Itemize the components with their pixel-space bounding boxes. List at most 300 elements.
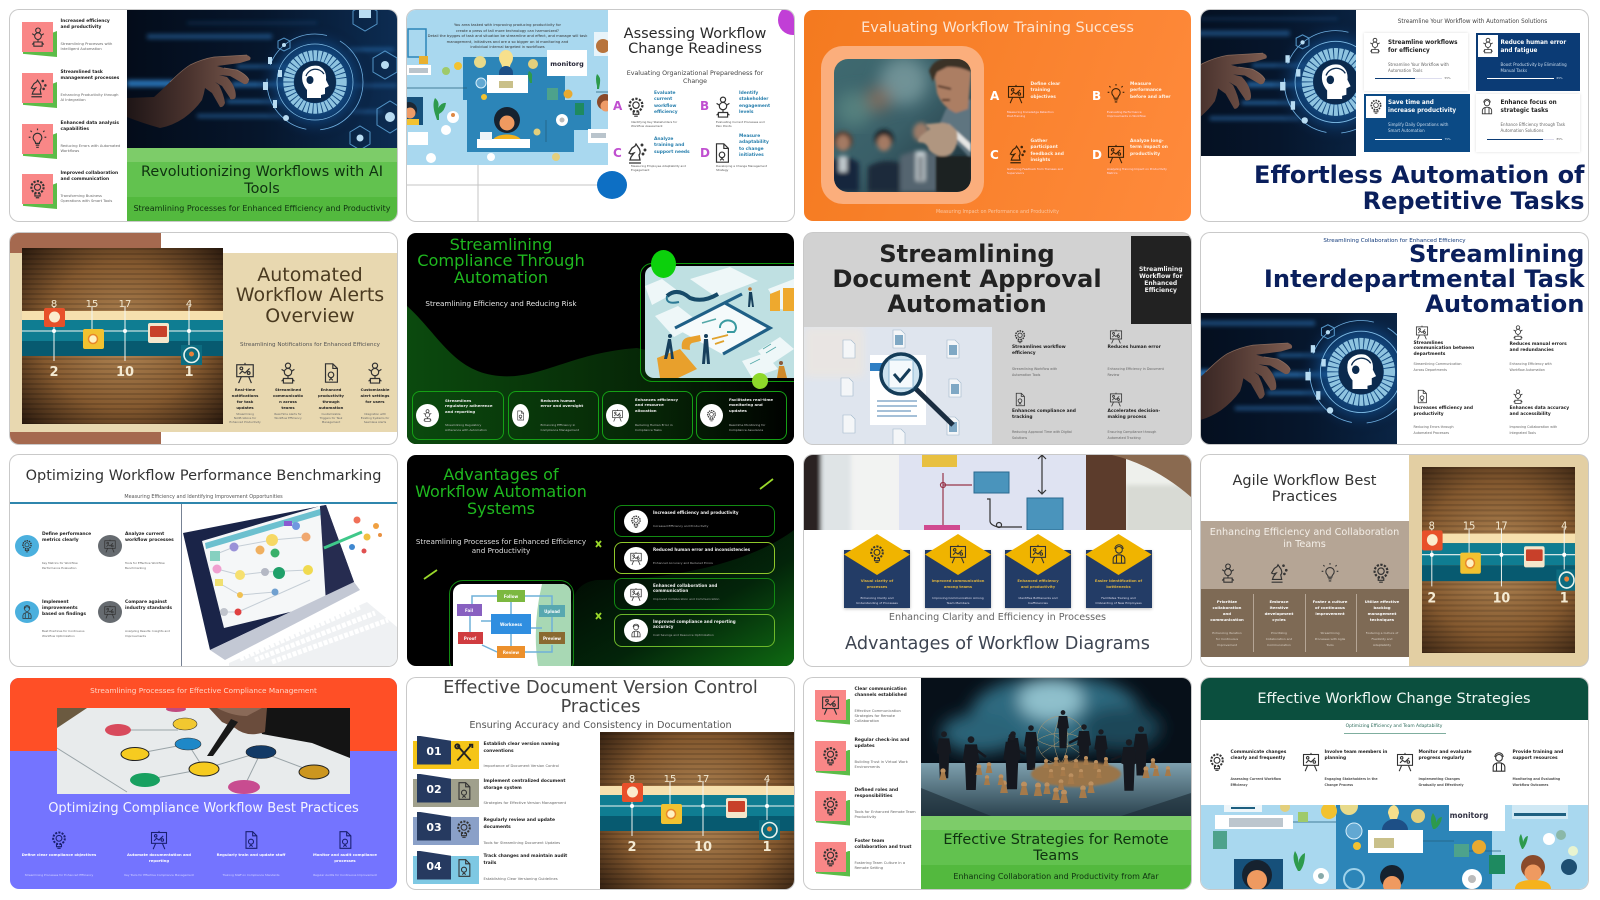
timeline illustration: 1 [762, 840, 772, 854]
card: reduce human error: and fatigue [1500, 48, 1537, 54]
illustration: workflow diagram: Follow [504, 594, 519, 599]
hero image: hand and AI interface [1201, 10, 1356, 156]
item D: term impact on [1130, 145, 1168, 150]
dark panel with practices: Improvement [1217, 643, 1237, 647]
item B: Evaluating Performance [1107, 110, 1142, 114]
illustration: workflow diagram: Workness [500, 622, 523, 627]
dark panel with practices: communication [1210, 617, 1244, 622]
title: Evaluating Workflow Training Success [861, 20, 1134, 36]
item: data analysis: Workflows [60, 149, 79, 153]
item: efficiency: Automated Processes [1414, 430, 1449, 434]
item: human error: Enhancing Efficiency in Document [1108, 366, 1164, 370]
box: regulatory adherence: regulatory adherence [445, 403, 493, 408]
title: Optimizing Workflow Performance Benchmarking [26, 468, 381, 484]
feature: customizable alerts: alert settings [361, 392, 389, 398]
feature: enhanced productivity: automation [319, 404, 343, 410]
illustration: workflow diagram: Preview [543, 636, 561, 641]
step 02: Implement centralized document [484, 778, 565, 784]
item: collaboration: Improved collaboration [60, 171, 118, 176]
dark panel with practices: Prioritizing [1271, 631, 1287, 635]
item: trust [815, 838, 912, 876]
panel: Evaluating Workflow Training Success: Analyze long- [1130, 139, 1164, 144]
item: workflow efficiency: Streamlines workflow [1012, 344, 1066, 350]
step 02: Strategies for Effective Version Management [484, 800, 566, 804]
badge: bottlenecks: bottlenecks [1106, 585, 1131, 589]
benefit: compliance: Improved compliance and reporting [653, 618, 736, 624]
timeline illustration: 2 [49, 364, 59, 380]
dark panel with practices: Embrace [1270, 599, 1288, 604]
item: analyze processes: Tools for Effective Workflow [125, 560, 165, 564]
card: enhance focus [1476, 94, 1580, 152]
badge: visual clarity: processes [867, 585, 887, 589]
feature: enhanced productivity: Customizable [322, 412, 340, 416]
item A [990, 82, 1060, 118]
subtitle: Streamline Your Workflow with Automation Solutions [1398, 19, 1547, 25]
item: communication [815, 686, 907, 724]
panel: Advantages of Workflow Automation Systems [407, 455, 794, 666]
benefit: compliance: accuracy [653, 624, 673, 629]
item B: Improvements in Workflow [1107, 114, 1146, 118]
panel: Assessing Workflow Change Readiness [407, 10, 794, 221]
box: real-time monitoring: Compliance Assurance [729, 428, 763, 432]
title: Effective Workflow Change Strategies [1257, 690, 1531, 706]
card: reduce human error: Manual Tasks [1500, 68, 1527, 73]
item: trust: collaboration and trust [854, 844, 912, 850]
item: industry standards: Analyzing Results: Insights and [125, 628, 170, 632]
item: manual errors: Enhancing Efficiency with [1510, 362, 1552, 366]
item D: productivity [1130, 152, 1160, 157]
illustration caption: individual internal targeted in workflows [470, 45, 545, 49]
item: human error: Review [1108, 372, 1119, 376]
panel: Streamlining Document Approval Automation [804, 232, 1191, 444]
title: Advantages of [443, 465, 559, 484]
panel: Automated Workflow Alerts Overview [10, 232, 397, 444]
panel: Streamlining Compliance Through Automation [407, 232, 794, 444]
strategy: communicate: Efficiency [1230, 782, 1248, 786]
badge: communication: among teams [944, 585, 972, 589]
item B: Evaluating Current Processes and [716, 120, 765, 124]
title: Tools [244, 180, 280, 196]
step 02 [413, 774, 566, 807]
item D: adaptability [739, 140, 769, 145]
item: manual errors: and redundancies [1510, 348, 1554, 353]
title: Effective Strategies for Remote [943, 832, 1169, 848]
step 03: documents [484, 825, 511, 830]
item: compliance tracking: Solutions [1012, 436, 1027, 440]
timeline illustration: 17 [1495, 521, 1507, 532]
title: Change Readiness [628, 41, 762, 57]
item C: C [990, 148, 999, 162]
item: define metrics: metrics clearly [42, 538, 79, 543]
card: save time: Simplify Daily Operations with [1388, 122, 1448, 127]
benefit: compliance: Cost Savings and Resource Optimization [653, 633, 714, 637]
item: efficiency: Reducing Errors through [1414, 425, 1454, 429]
title: Effective Document Version Control [443, 678, 758, 698]
dark panel with practices: Flexibility and [1372, 637, 1392, 641]
item: communication [1414, 326, 1474, 372]
item: data accuracy: Integrated Tools [1510, 430, 1536, 434]
item A: current [654, 97, 672, 102]
box: efficiency and resources: allocation [635, 408, 657, 413]
feature: enhanced productivity: Triggers for Task [320, 416, 342, 420]
item: efficiency: productivity [1414, 412, 1444, 417]
timeline illustration: 2 [1427, 591, 1436, 606]
benefit: human error: Enhanced Accuracy and Reduced Errors [653, 561, 713, 565]
card: streamline workflows: Streamline Your Workflow with [1388, 62, 1449, 67]
dark panel with practices: iterative [1270, 605, 1288, 610]
item: task management: Streamlined task [60, 70, 103, 75]
item: roles [815, 788, 916, 826]
box: real-time monitoring: Facilitates real-time [729, 396, 773, 402]
illustration: workflow diagram [453, 584, 571, 666]
title: Streamlining [1409, 240, 1584, 268]
item: industry standards: industry standards [125, 606, 172, 611]
item: task management [22, 70, 119, 108]
item: workflow efficiency: Automation Tools [1012, 372, 1040, 376]
step 02: 02 [426, 782, 442, 796]
badge: visual clarity: Enhancing Clarity and [860, 596, 894, 600]
card: reduce human error: Boost Productivity by Eliminating [1500, 62, 1567, 67]
illustration caption: create a press of tall more technology can harmonized? [456, 28, 559, 32]
card: save time: increase productivity [1388, 108, 1456, 114]
card: reduce human error: 65% [1556, 76, 1563, 80]
benefit: human error: Reduced human error and inconsistencies [653, 546, 750, 552]
title: Document Approval [832, 264, 1102, 292]
dark panel with practices [1200, 589, 1408, 657]
step 03: 03 [426, 820, 442, 834]
feature: enhanced productivity: productivity [318, 392, 344, 398]
title: Automation [454, 268, 548, 287]
item: efficiency: and productivity [60, 25, 101, 30]
item: communication: Clear communication [854, 686, 907, 692]
item: roles: Defined roles and [854, 788, 898, 792]
feature: real-time notifications [229, 362, 261, 424]
title band [921, 816, 1191, 888]
box: efficiency and resources: Reducing Human Error in [635, 422, 673, 426]
strategy: training: Provide training and [1512, 750, 1563, 754]
item: data analysis: capabilities [60, 127, 89, 132]
timeline illustration: 8 [1428, 521, 1434, 532]
photo: man pointing [834, 59, 971, 192]
benefit: collaboration [614, 578, 775, 610]
item: data analysis [22, 120, 120, 159]
item: documentation: reporting [149, 858, 169, 862]
item: data accuracy [1510, 389, 1569, 434]
box: regulatory adherence: Streamlining Regulatory [445, 422, 481, 426]
accent dot: green [651, 250, 676, 278]
item A: Measuring Knowledge Retention [1007, 110, 1054, 114]
badge: communication: Team Members [947, 601, 969, 605]
timeline illustration: 10 [1492, 591, 1510, 606]
card: save time: Smart Automation [1388, 128, 1425, 133]
item: train staff: Regularly train and update staff [217, 852, 285, 856]
title [407, 466, 595, 517]
card: reduce human error [1476, 33, 1580, 91]
item A [613, 90, 678, 128]
strategy: involve: planning [1324, 756, 1346, 760]
divider line [10, 502, 397, 504]
item: efficiency: Increased efficiency [60, 19, 110, 24]
box: regulatory adherence: and reporting [445, 409, 475, 414]
item D: Metrics [1107, 171, 1118, 175]
item: check-ins [815, 738, 910, 776]
item: collaboration: and communication [60, 177, 109, 182]
feature: streamlined communication: teams [281, 404, 295, 410]
illustration: workplace dashboard: monitorg [1449, 810, 1488, 820]
item: decision-making [1108, 392, 1160, 440]
badge: communication: Improving Communication Among [932, 596, 984, 600]
item: workflow efficiency: Streamlining Workflow with [1012, 366, 1057, 370]
dark panel with practices: management [1368, 611, 1396, 616]
item A: A [990, 89, 999, 103]
item B: Measure [1130, 82, 1151, 87]
green wave background [407, 455, 794, 666]
item C: feedback and [1030, 152, 1064, 157]
subtitle: Change [683, 78, 707, 85]
feature: enhanced productivity: Enhanced [321, 386, 341, 392]
box: real-time monitoring: updates [729, 408, 747, 413]
illustration: workflow diagram: Proof [464, 636, 476, 641]
illustration: workflow diagram: Fail [465, 608, 474, 613]
title [624, 26, 766, 57]
box: real-time monitoring: monitoring and [729, 402, 763, 407]
item B: performance [1130, 88, 1162, 93]
beige background and brown accents [10, 233, 397, 444]
item A: workflow [654, 104, 676, 109]
item: manual errors: Workflow Automation [1510, 368, 1545, 372]
hero image: hand and AI interface [1201, 313, 1397, 444]
panel: Optimizing Workflow Performance Benchmarking [10, 455, 397, 666]
item B: engagement [739, 104, 770, 109]
item: train staff: Training Staff on Compliance Standards [222, 872, 280, 876]
item: decision-making: Automated Tracking [1108, 436, 1141, 440]
badge: efficiency [1003, 534, 1073, 611]
strategy: training: support resources [1512, 756, 1558, 760]
item: objectives: Streamlining Processes for Enhanced Efficiency [25, 872, 93, 876]
item C: training and [654, 143, 684, 148]
accent dot: lime [752, 372, 768, 388]
timeline illustration: 2 [627, 840, 637, 854]
panel: Effective Workflow Change Strategies [1200, 678, 1588, 888]
item D: Developing a Change Management [716, 164, 767, 168]
badge: visual clarity: Understanding of Processes [856, 601, 898, 605]
dark panel with practices: Tools [1326, 643, 1334, 647]
illustration: workplace dashboard: monitorg [550, 60, 584, 68]
badge: communication [923, 534, 993, 611]
badge: bottlenecks [1084, 534, 1154, 611]
item: compliance tracking: tracking [1012, 414, 1033, 420]
item D: D [700, 146, 710, 160]
panel: Effortless Automation of Repetitive Tasks [1200, 10, 1588, 221]
illustration caption: management, initiatives and are a so bigger on id monitoring and [447, 40, 568, 44]
item: objectives: Define clear compliance objectives [22, 852, 96, 856]
dark panel with practices: improvement [1315, 611, 1345, 616]
timeline illustration: 17 [119, 298, 131, 310]
illustration: workflow diagram: Upload [544, 609, 560, 614]
benefit: collaboration: Improved Collaboration and Communication [653, 597, 719, 601]
strategy: monitor [1394, 750, 1484, 788]
box: efficiency and resources: Enhances efficiency [635, 396, 678, 402]
feature: customizable alerts: for users [365, 398, 385, 404]
item: audit: Regular Audits for Continuous Improvement [313, 872, 377, 876]
image frame [640, 262, 810, 382]
illustration: workflow dashboard on monitor [10, 455, 397, 666]
strategy: training: Monitoring and Evaluating [1512, 776, 1560, 780]
benefit: compliance [614, 614, 775, 647]
item: implement improvements: based on findings [42, 612, 86, 617]
dark panel with practices: Prioritize [1217, 599, 1237, 604]
step 03: Tools for Streamlining Document Updates [484, 840, 560, 844]
box: human error: Compliance Management [540, 428, 579, 432]
item D [700, 134, 769, 172]
title: Repetitive Tasks [1363, 187, 1584, 215]
white footer strip [1200, 657, 1408, 666]
card: save time: 75% [1444, 136, 1451, 140]
timeline illustration: 1 [1559, 591, 1568, 606]
title: Teams [1033, 848, 1079, 864]
item D [1092, 138, 1168, 175]
dark panel with practices: and [1223, 611, 1231, 616]
item A: training [1030, 88, 1050, 93]
title: Agile Workflow Best [1232, 473, 1376, 489]
box: efficiency and resources: Compliance Tasks [635, 428, 662, 432]
subtitle: Evaluating Organizational Preparedness for [627, 70, 763, 77]
item B: Pain Points [716, 124, 732, 128]
title: Automated [257, 264, 363, 286]
dark panel with practices: Processes with Agile [1315, 637, 1345, 641]
item: audit: processes [334, 858, 356, 862]
item: audit: Monitor and audit compliance [313, 852, 377, 856]
strategy: monitor: Gradually and Effectively [1418, 782, 1464, 786]
timeline illustration: 15 [86, 298, 98, 310]
sidebar callout: Workflow for [1139, 273, 1182, 280]
item B: B [1092, 89, 1101, 103]
box: regulatory adherence: Streamlines [445, 398, 471, 402]
feature: real-time notifications: Enhanced Productivity [229, 420, 261, 424]
item: communication: Strategies for Remote [854, 714, 895, 718]
item C: Gathering Feedback from Trainees and [1007, 167, 1063, 171]
item: efficiency: Streamlining Processes with [60, 42, 112, 46]
item: communication: Across Departments [1414, 368, 1447, 372]
step 01 [413, 736, 560, 769]
card: streamline workflows: 55% [1444, 76, 1451, 80]
dark panel with practices: techniques [1370, 617, 1394, 622]
feature: enhanced productivity [318, 363, 344, 424]
item: implement improvements: Best Practices for Continuous [42, 628, 85, 632]
badge: communication: Improved communication [932, 579, 984, 583]
dark panel with practices: Utilize effective [1365, 599, 1399, 604]
item: trust: Foster team [854, 838, 884, 844]
beige panel with subtitle and icons [1200, 521, 1408, 589]
subtitle: Streamlining Efficiency and Reducing Risk [425, 298, 577, 308]
dark panel with practices: Foster a culture [1313, 599, 1347, 604]
feature: streamlined communication: communicatio [273, 392, 303, 398]
subtitle: Optimizing Efficiency and Team Adaptability [1346, 724, 1442, 728]
item D: D [1092, 148, 1102, 162]
title [236, 264, 384, 326]
sidebar callout [1130, 236, 1191, 324]
beige panel with subtitle and icons: Enhancing Efficiency and Collaboration [1210, 527, 1399, 538]
box: human error [508, 390, 598, 440]
step 04: trails [484, 861, 496, 866]
title: Workflow Alerts [236, 284, 384, 306]
item C: Analyze [654, 137, 673, 142]
item B [700, 90, 770, 128]
step 04: 04 [426, 860, 442, 872]
dark panel with practices: cycles [1272, 617, 1286, 622]
panel: Optimizing Compliance Workflow Best Practices [10, 678, 397, 888]
item: check-ins: Building Trust in Virtual Work [854, 760, 908, 764]
title: Compliance Through [417, 251, 585, 270]
item: decision-making: Ensuring Compliance through [1108, 430, 1156, 434]
item: audit [301, 830, 389, 880]
item: implement improvements [15, 600, 95, 640]
box: regulatory adherence: Adherence with Automation [445, 428, 487, 432]
subtitle underline [1344, 732, 1446, 735]
box: human error: Enhancing Efficiency in [540, 422, 575, 426]
item: define metrics: Key Metrics for Workflow [42, 560, 78, 564]
dark panel with practices: Collaboration and [1266, 637, 1292, 641]
title: Assessing Workflow [624, 26, 766, 42]
benefit: efficiency [614, 505, 775, 537]
item C: Engagement [631, 168, 649, 172]
item C: insights [1030, 158, 1050, 163]
item: compliance tracking [1012, 392, 1076, 440]
item: data accuracy: and accessibility [1510, 412, 1551, 417]
box: efficiency and resources [602, 390, 693, 440]
step 01: Importance of Document Version Control [484, 764, 559, 768]
badge: efficiency: Enhanced efficiency [1017, 579, 1059, 583]
item C: C [613, 146, 622, 160]
title [921, 832, 1191, 864]
card: enhance focus: strategic tasks [1500, 108, 1548, 114]
strategy: involve: Involve team members in [1324, 750, 1387, 754]
panel: Effective Strategies for Remote Teams [804, 678, 1191, 888]
panel: Effective Document Version Control Practices [407, 678, 794, 888]
item: human error [1108, 330, 1164, 376]
item: data analysis: Enhanced data analysis [60, 121, 119, 126]
illustration: workplace dashboard [1200, 804, 1588, 888]
item: communication: Effective Communication [854, 709, 901, 713]
card: enhance focus: Enhance focus on [1500, 100, 1557, 106]
step 02: storage system [484, 786, 522, 790]
title [832, 240, 1102, 318]
benefit: efficiency: Increased Efficiency and Productivity [653, 524, 708, 528]
item: decision-making: Accelerates decision- [1108, 408, 1160, 414]
item: workflow efficiency [1012, 330, 1066, 376]
title: Automation [887, 290, 1047, 318]
badge: visual clarity: Visual clarity of [861, 579, 893, 583]
item: check-ins: updates [854, 744, 875, 748]
strategy: involve: Engaging Stakeholders in the [1324, 776, 1378, 780]
item B [1092, 82, 1171, 118]
photo frame [821, 46, 984, 204]
card: streamline workflows: Streamline workflows [1388, 40, 1458, 46]
feature: customizable alerts: Existing Systems for [361, 416, 389, 420]
dark panel with practices: Communication [1267, 643, 1291, 647]
benefit: collaboration: Enhanced collaboration and [653, 582, 717, 588]
timeline illustration: 4 [764, 774, 770, 784]
title: Automation [1425, 290, 1584, 318]
title: Workflow Automation [415, 482, 587, 501]
step 03 [413, 812, 560, 845]
item: roles: Tools for Enhanced Remote Team [854, 810, 916, 814]
title: Practices [561, 696, 640, 716]
item A: A [613, 99, 622, 113]
item: communication: Collaboration [854, 719, 879, 723]
feature: customizable alerts: Seamless Alerts [364, 420, 386, 424]
box: human error: Reduces human [540, 398, 575, 402]
